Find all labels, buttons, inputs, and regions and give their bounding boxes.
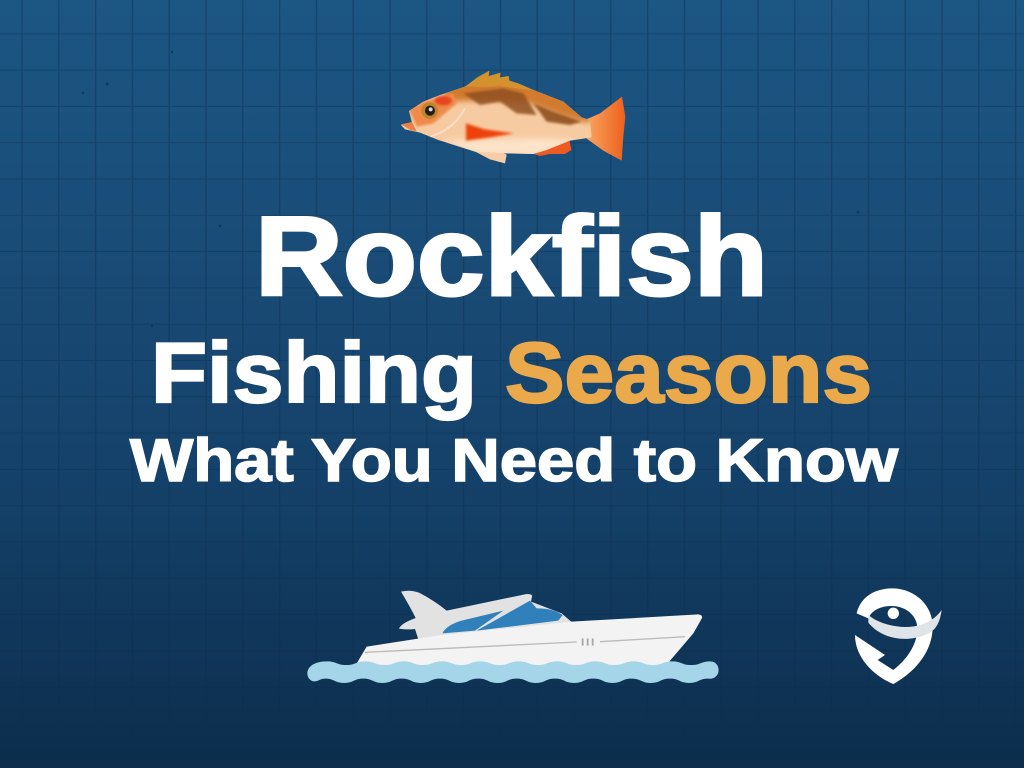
title: Rockfish: Rockfish — [255, 194, 768, 319]
gill cover — [430, 108, 465, 137]
heading: Fishing: Fishing — [151, 326, 477, 421]
side window — [442, 611, 503, 633]
tail fin — [585, 97, 625, 161]
hull — [354, 614, 702, 667]
dorsal fin — [465, 71, 535, 92]
icon: rockfish — [397, 71, 625, 163]
logo eye — [888, 608, 899, 619]
body — [401, 86, 592, 154]
hull stripe — [365, 637, 685, 652]
vents — [583, 638, 593, 646]
waves — [307, 661, 719, 683]
cabin — [399, 591, 572, 639]
subtitle: What You Need to Know: What You Need to Know — [130, 427, 898, 494]
pelvic fin — [473, 151, 507, 163]
logo band — [868, 610, 942, 639]
red patch — [466, 123, 514, 141]
eye — [421, 102, 438, 119]
front window — [477, 601, 563, 631]
anal fin — [534, 140, 571, 156]
back colouring — [433, 80, 590, 123]
lower belly — [440, 138, 577, 157]
heading: Seasons: Seasons — [505, 326, 872, 421]
icon: fish logo — [855, 588, 942, 684]
head colouring — [409, 93, 457, 127]
back markings — [463, 88, 582, 125]
mouth — [401, 122, 417, 131]
logo ring — [855, 588, 933, 684]
icon: boat on waves — [307, 591, 719, 683]
